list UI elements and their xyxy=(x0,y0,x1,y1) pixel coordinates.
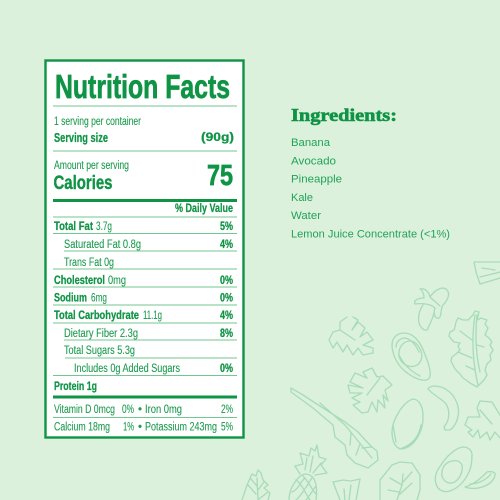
ingredient list: Banana xyxy=(291,137,331,149)
icon: pineapple slice xyxy=(333,479,360,500)
ingredient list xyxy=(291,137,450,240)
icon: round leaf xyxy=(380,462,420,500)
daily value table: 5% xyxy=(220,221,233,233)
daily value table: Trans Fat 0g xyxy=(64,257,114,269)
daily value table: 6mg xyxy=(91,292,107,304)
vitamins and minerals: Iron 0mg xyxy=(145,404,182,416)
serving information: Serving size xyxy=(54,130,108,145)
vitamins and minerals: 0% xyxy=(122,404,134,416)
vitamins and minerals: Vitamin D 0mcg xyxy=(54,404,115,416)
vitamins and minerals: 2% xyxy=(221,404,233,416)
daily value table: Saturated Fat 0.8g xyxy=(64,239,141,251)
serving information: (90g) xyxy=(201,130,234,144)
daily value table: 0mg xyxy=(108,275,126,287)
icon: small palm leaf xyxy=(242,470,270,500)
icon: spinach leaf xyxy=(291,388,378,468)
icon: pineapple chunk xyxy=(474,262,500,284)
calories xyxy=(54,160,233,194)
title: Nutrition Facts xyxy=(55,68,230,105)
calories: Calories xyxy=(54,173,112,194)
serving information xyxy=(54,116,234,145)
daily value table: Total Fat xyxy=(54,221,93,233)
icon: peeled banana xyxy=(415,288,449,330)
panel: ingredients xyxy=(291,105,450,240)
daily value table: 0% xyxy=(220,363,233,375)
vitamins and minerals: • xyxy=(138,404,142,416)
ingredient list: Water xyxy=(291,210,321,222)
daily value table: % Daily Value xyxy=(175,203,233,215)
daily value table: 4% xyxy=(220,239,233,251)
ingredient list: Kale xyxy=(291,192,313,204)
daily value table: Total Sugars 5.3g xyxy=(64,345,135,357)
ingredient list: Avocado xyxy=(291,156,336,168)
calories: Amount per serving xyxy=(54,160,129,172)
daily value table: Includes 0g Added Sugars xyxy=(74,363,180,375)
illustration: produce line drawings xyxy=(242,262,500,500)
vitamins and minerals: Potassium 243mg xyxy=(145,422,217,434)
ingredient list: Lemon Juice Concentrate (<1%) xyxy=(291,228,450,240)
daily value table: Sodium xyxy=(54,292,87,304)
daily value table: 11.1g xyxy=(143,310,162,322)
ingredient list: Pineapple xyxy=(291,174,342,186)
daily value table: 0% xyxy=(220,275,233,287)
vitamins and minerals: 1% xyxy=(123,422,134,434)
daily value table: 8% xyxy=(220,328,233,340)
icon: avocado slice xyxy=(465,472,495,488)
calories: 75 xyxy=(207,160,233,192)
daily value table: Total Carbohydrate xyxy=(54,310,139,322)
heading: Ingredients: xyxy=(291,105,397,125)
daily value table: Protein 1g xyxy=(54,381,97,393)
icon: banana xyxy=(428,386,459,430)
vitamins and minerals: 5% xyxy=(221,422,233,434)
icon: monstera lower xyxy=(348,368,392,413)
vitamins and minerals xyxy=(54,404,233,434)
icon: avocado half lower xyxy=(435,447,472,492)
icon: pineapple xyxy=(289,445,327,500)
icon: avocado half upper xyxy=(392,333,430,380)
icon: monstera upper xyxy=(329,317,373,355)
daily value table: 0% xyxy=(220,292,233,304)
icon: monstera right xyxy=(465,401,500,440)
vitamins and minerals: Calcium 18mg xyxy=(54,422,110,434)
daily value table: 3.7g xyxy=(96,221,112,233)
daily value table: Dietary Fiber 2.3g xyxy=(64,328,138,340)
panel: nutrition facts xyxy=(46,60,244,438)
icon: kale leaf xyxy=(449,311,493,387)
icon: mango xyxy=(392,399,423,449)
daily value table: 4% xyxy=(220,310,233,322)
serving information: 1 serving per container xyxy=(54,116,141,128)
vitamins and minerals: • xyxy=(138,422,142,434)
daily value table: Cholesterol xyxy=(54,275,105,287)
daily value table xyxy=(54,203,233,393)
